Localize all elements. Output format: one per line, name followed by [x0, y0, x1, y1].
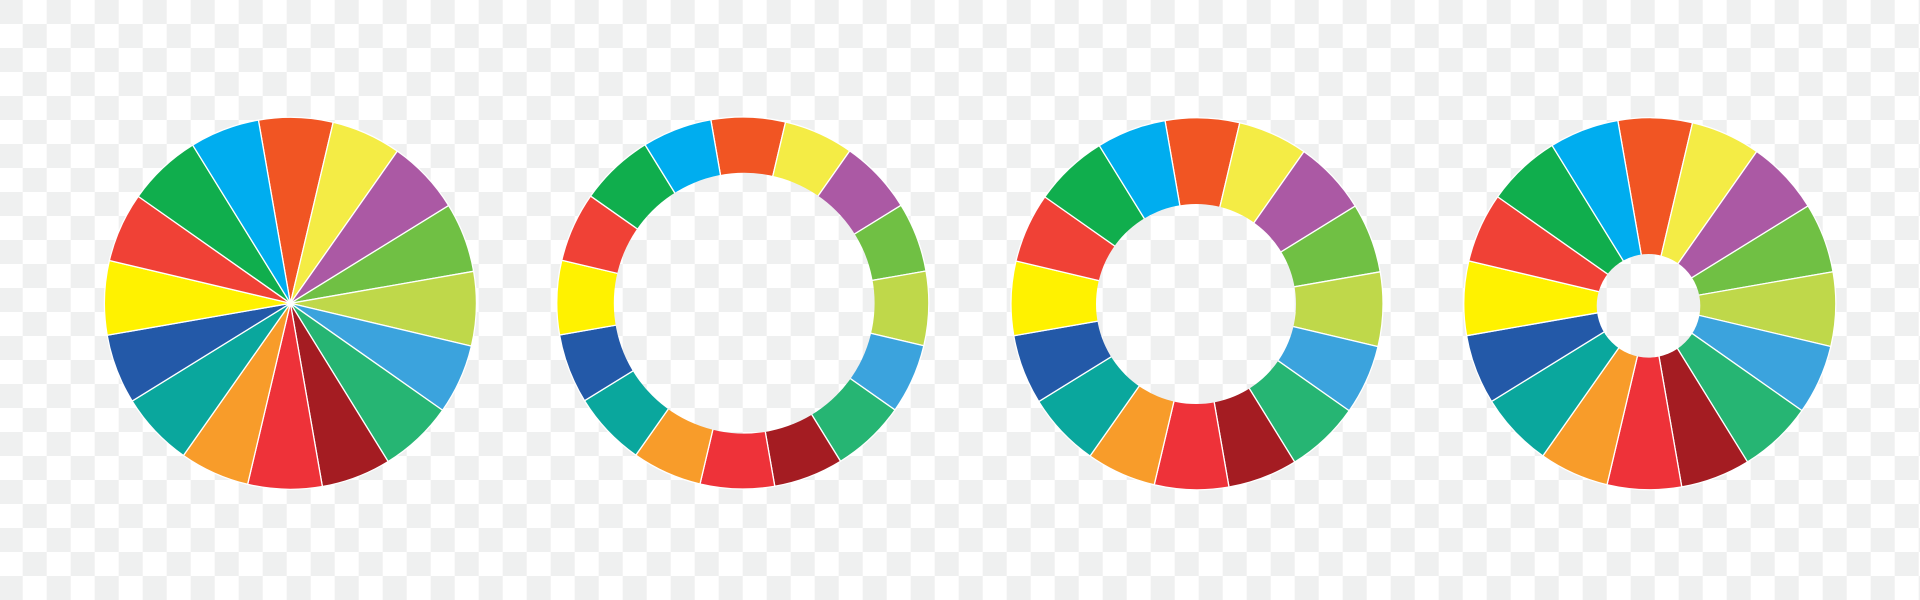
- wheel 2: thin ring with 16 segments: [547, 107, 939, 499]
- wheel 4: thick donut with small hole and 16 segments: [1454, 108, 1846, 500]
- wheel 3: medium donut with 16 segments: [1001, 108, 1393, 500]
- wheel 1: full pie with 16 segments: [95, 107, 486, 499]
